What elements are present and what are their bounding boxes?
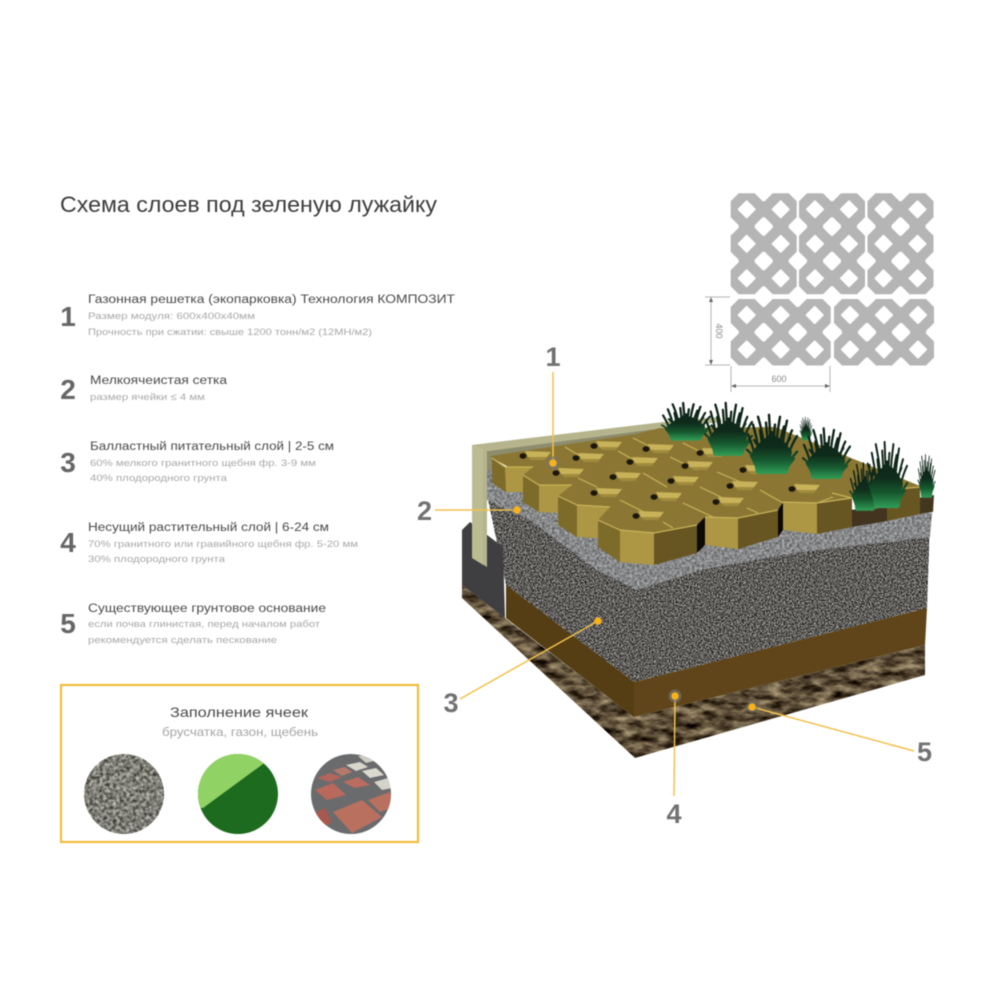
callout 5: 5	[917, 737, 932, 767]
dark gap	[778, 502, 783, 537]
gap behind edging	[487, 428, 662, 470]
photo: lawn	[198, 754, 278, 834]
panel heading: Заполнение ячеек	[170, 704, 309, 720]
tile block B	[523, 475, 572, 513]
callout 2	[417, 496, 523, 526]
tile cells	[520, 441, 820, 520]
legend item 5: Существующее грунтовое основание	[88, 603, 326, 615]
legend item 4: 30% плодородного грунта	[88, 554, 226, 565]
legend item 5: рекомендуется сделать пескование	[88, 635, 277, 646]
tile block C	[558, 496, 610, 538]
layer 4: brown load-bearing layer	[506, 585, 927, 717]
dimension 400: 400	[714, 323, 724, 339]
grass tufts	[662, 403, 935, 510]
legend item 5: 5	[60, 608, 76, 639]
legend item 3: Балластный питательный слой | 2-5 см	[90, 441, 334, 453]
tile block A	[492, 458, 533, 492]
legend item 1: Размер модуля: 600x400x40мм	[88, 311, 255, 322]
callout 3: 3	[443, 688, 459, 718]
layer 3: gravel	[487, 495, 930, 682]
tile block 2	[705, 510, 778, 549]
photo: crushed stone	[84, 754, 164, 834]
soil patch between tiles	[852, 505, 887, 527]
tile top surface	[490, 427, 925, 533]
callout 2: 2	[417, 496, 432, 526]
legend item 1: 1	[60, 301, 76, 332]
tile block 3	[783, 498, 852, 534]
legend item 4: 4	[60, 527, 76, 558]
panel subheading: брусчатка, газон, щебень	[162, 725, 318, 739]
legend item 2	[60, 374, 228, 405]
tile block 4	[870, 487, 920, 521]
legend item 4	[60, 522, 358, 565]
legend item 3: 3	[60, 447, 76, 478]
legend item 2: Мелкоячеистая сетка	[90, 375, 228, 387]
legend item 3: 40% плодородного грунта	[90, 473, 228, 484]
legend item 1: Прочность при сжатии: свыше 1200 тонн/м2 (12МН/м2)	[88, 327, 372, 338]
legend item 4: Несущий растительный слой | 6-24 см	[88, 522, 329, 534]
callout 4: 4	[666, 799, 682, 829]
title: Схема слоев под зеленую лужайку	[60, 192, 437, 217]
callout 5	[746, 701, 932, 767]
callout 4	[666, 690, 682, 829]
panel: cell filling	[61, 685, 418, 842]
callout 3	[443, 617, 602, 718]
soil patch at right edge	[918, 495, 934, 514]
legend item 2: размер ячейки ≤ 4 мм	[90, 392, 205, 403]
layer 5: existing soil	[462, 585, 925, 758]
beige edging	[472, 417, 722, 567]
dimension 600: 600	[771, 374, 787, 384]
photo: paving	[311, 754, 392, 834]
layer 2: fine mesh band	[487, 462, 932, 590]
callout 1: 1	[545, 342, 561, 372]
dimension 600	[731, 366, 830, 392]
dimension 400	[705, 297, 730, 365]
tile ridge lines	[492, 438, 920, 533]
legend item 3	[60, 441, 334, 484]
legend item 5	[60, 603, 326, 646]
callout 1	[545, 342, 561, 470]
legend item 3: 60% мелкого гранитного щебня фр. 3-9 мм	[90, 458, 316, 469]
legend item 4: 70% гранитного или гравийного щебня фр. 5-20 мм	[88, 539, 358, 550]
legend item 5: если почва глинистая, перед началом работ	[88, 619, 321, 630]
dark curb	[462, 522, 505, 618]
layered ground cross-section	[462, 403, 935, 758]
legend item 1: Газонная решетка (экопарковка) Технология КОМПОЗИТ	[88, 294, 455, 306]
legend item 2: 2	[60, 374, 76, 405]
dark gap	[697, 517, 705, 553]
lattice module diagram	[705, 193, 934, 392]
tile block front	[598, 520, 697, 565]
legend item 1	[60, 294, 455, 338]
